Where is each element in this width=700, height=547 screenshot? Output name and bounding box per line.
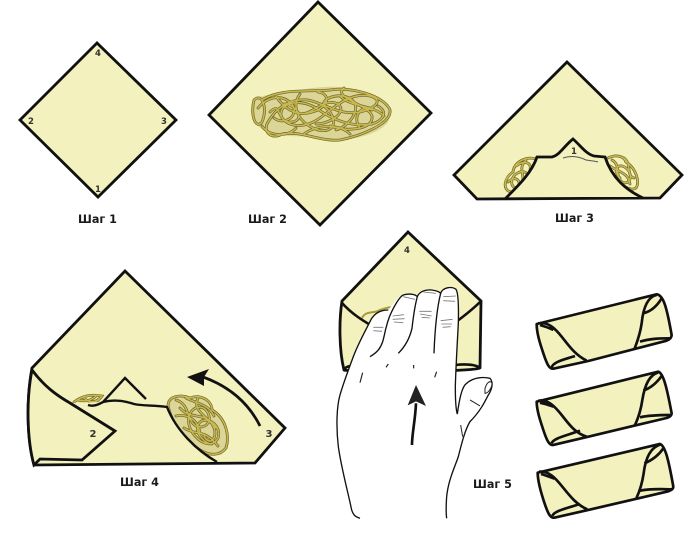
finished roll 2 <box>537 372 672 445</box>
label: step 5: Шаг 5 <box>473 478 512 491</box>
step 1: square wrapper <box>20 43 176 197</box>
step 2: wrapper with noodles <box>209 2 431 225</box>
corner number 1: 1 <box>571 147 577 157</box>
step 4: wrapper with two corners folded <box>28 271 285 465</box>
noodles large <box>168 396 227 454</box>
arrow <box>408 385 426 445</box>
corner number 4: 4 <box>404 246 410 256</box>
step 3: wrapper with bottom corner folded <box>454 62 682 199</box>
noodles left <box>505 158 536 192</box>
corner number 3: 3 <box>266 429 273 440</box>
label: step 4: Шаг 4 <box>120 476 159 489</box>
corner number 2: 2 <box>90 429 97 440</box>
arrow <box>187 369 260 426</box>
label: step 2: Шаг 2 <box>248 213 287 226</box>
folded flap <box>507 139 640 197</box>
finished roll 3 <box>538 444 673 518</box>
centre flap <box>70 378 217 461</box>
corner number 3: 3 <box>161 117 167 127</box>
label: step 3: Шаг 3 <box>555 212 594 225</box>
hand <box>337 288 492 518</box>
noodles <box>362 307 396 318</box>
noodles right <box>608 156 638 189</box>
corner number 1: 1 <box>95 185 101 195</box>
finished roll 1 <box>537 294 672 369</box>
noodles small <box>74 395 102 405</box>
noodles <box>251 87 390 140</box>
crease line <box>563 157 598 162</box>
label: step 1: Шаг 1 <box>78 213 117 226</box>
corner number 4: 4 <box>95 49 101 59</box>
corner number 2: 2 <box>28 117 34 127</box>
left flap with corner 2 <box>28 370 115 465</box>
step 5: wrapper under hand <box>337 232 492 518</box>
